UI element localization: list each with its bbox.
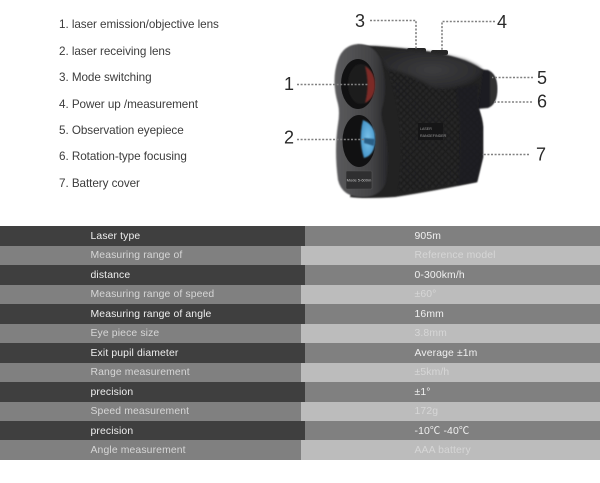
number 3: 3 — [355, 11, 365, 31]
row: measuring range: Measuring range of — [90, 250, 182, 261]
row: range measurement — [0, 362, 600, 382]
list item 7: 7. Battery cover — [59, 176, 140, 190]
rangefinder device — [334, 44, 497, 198]
row: precision temperature: precision — [90, 426, 133, 437]
lower lens (laser receiving) — [342, 115, 376, 167]
row: speed measurement: Speed measurement — [90, 406, 189, 417]
device body — [350, 45, 483, 198]
row: exit pupil diameter: Exit pupil diameter — [90, 348, 178, 359]
row: distance: 0-300km/h — [414, 270, 465, 281]
list item 4: 4. Power up /measurement — [59, 98, 198, 110]
row: precision — [0, 382, 600, 402]
row: angle measurement: Angle measurement — [90, 445, 186, 456]
number 2: 2 — [284, 128, 294, 148]
row: precision: ±1° — [414, 387, 431, 398]
row: laser type: 905m — [414, 231, 441, 242]
side panel — [456, 84, 483, 185]
top cover — [372, 47, 482, 89]
row: precision temperature: -10℃ -40℃ — [414, 426, 469, 437]
brand label: LASER — [420, 127, 432, 131]
row: range measurement: ±5km/h — [414, 367, 449, 378]
row: angle measurement — [0, 440, 600, 460]
list item 6: 6. Rotation-type focusing — [59, 150, 187, 163]
model plate: Mode 5-600m — [347, 178, 372, 182]
row: eye piece size — [0, 324, 600, 343]
row: distance: distance — [90, 270, 130, 281]
row: speed measurement — [0, 402, 600, 421]
specification table — [0, 226, 600, 460]
row: precision: precision — [90, 387, 133, 398]
eyepiece — [476, 69, 497, 109]
list item 1: 1. laser emission/objective lens — [59, 18, 219, 31]
row: angle range: Measuring range of angle — [90, 309, 211, 320]
row: speed measurement: 172g — [414, 406, 438, 417]
number 1: 1 — [284, 74, 294, 94]
list item 3: 3. Mode switching — [59, 71, 152, 84]
row: measuring range: Reference model — [414, 250, 496, 261]
upper lens (laser emission) — [341, 59, 375, 109]
row: exit pupil diameter: Average ±1m — [414, 348, 477, 359]
row: range measurement: Range measurement — [90, 367, 190, 378]
number 6: 6 — [537, 92, 547, 112]
row: measuring range — [0, 246, 600, 265]
row: eye piece size: 3.8mm — [414, 328, 447, 339]
product diagram — [284, 11, 547, 200]
row: eye piece size: Eye piece size — [90, 328, 159, 339]
row: speed range: ±60° — [414, 289, 436, 300]
row: distance — [0, 265, 600, 284]
number 4: 4 — [497, 12, 507, 32]
list item 5: 5. Observation eyepiece — [59, 124, 184, 137]
row: angle measurement: AAA battery — [414, 445, 471, 456]
row: speed range: Measuring range of speed — [90, 289, 214, 300]
callout numbers — [284, 11, 547, 164]
number 7: 7 — [536, 144, 546, 164]
brand label: RANGEFINDER — [420, 134, 447, 138]
row: speed range — [0, 284, 600, 304]
grip texture — [388, 70, 482, 192]
row: angle range — [0, 304, 600, 324]
row: exit pupil diameter — [0, 343, 600, 362]
parts list — [59, 18, 219, 190]
model plate — [346, 171, 372, 189]
row: laser type: Laser type — [90, 231, 140, 242]
callout lines — [297, 20, 533, 154]
row: angle range: 16mm — [414, 309, 444, 320]
number 5: 5 — [537, 68, 547, 88]
list item 2: 2. laser receiving lens — [59, 44, 171, 58]
row: precision temperature — [0, 421, 600, 440]
front plate — [334, 44, 388, 197]
row: laser type — [0, 226, 600, 246]
brand label — [418, 123, 447, 140]
icon: top buttons — [407, 48, 448, 55]
